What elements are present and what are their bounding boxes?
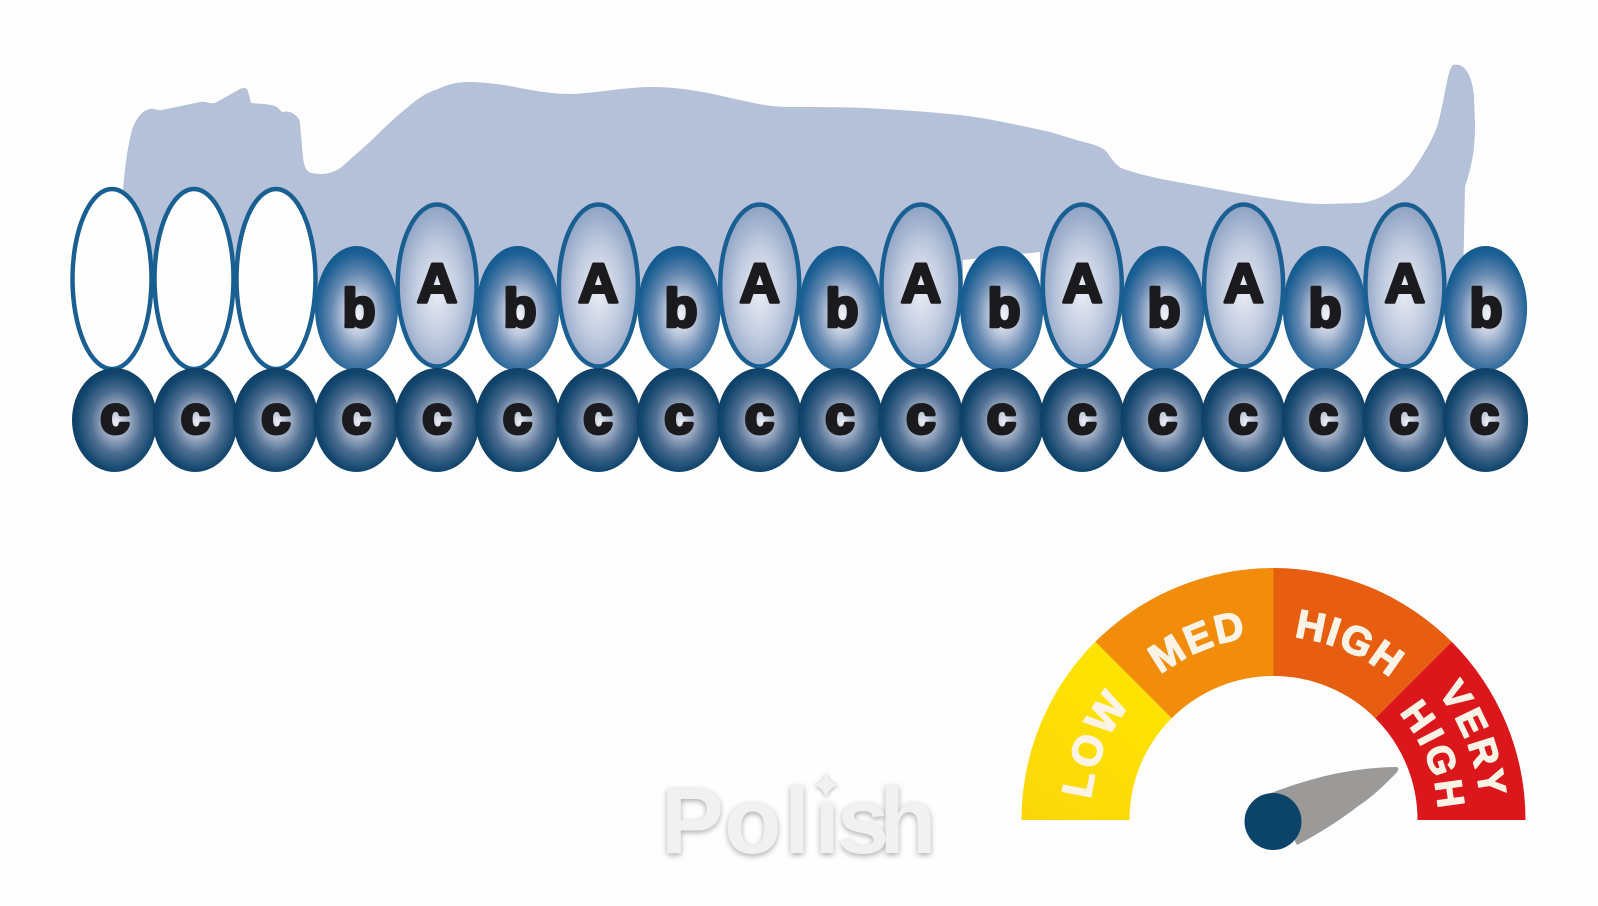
cell A 6 [1204,204,1283,366]
cell A 1: A [417,252,457,314]
cell c 8 [637,368,722,472]
cell c 7 [556,368,641,472]
cell A 4 [882,204,960,366]
cell b 2: b [504,278,536,338]
cell c 18: c [1470,387,1499,445]
cell c 6: c [503,387,532,445]
row of b cells [315,246,1527,371]
cell b 8: b [1470,278,1502,338]
row of A cells [398,204,1444,366]
row of c cells [72,368,1528,472]
cell A 3 [720,204,799,366]
cell c 14: c [1148,387,1177,445]
gauge segment: high [1274,568,1452,718]
empty missing cells [72,189,316,369]
cell c 3 [233,368,318,472]
cell A 1 [398,204,477,366]
gauge label: LOW: LOW [1062,688,1126,798]
cell A 3: A [739,252,780,314]
cell c 13: c [1068,387,1096,445]
gauge label: VERY: VERY [1442,676,1507,793]
Polish watermark logo [661,768,936,873]
cell c 9: c [745,387,774,445]
empty cell 2 [154,189,234,369]
cell b 4 [799,246,882,371]
cell c 17 [1362,368,1447,472]
empty cell 1 [72,189,152,369]
cell A 5 [1043,204,1122,366]
cell c 16: c [1309,387,1338,445]
gauge segment: medium [1095,568,1274,718]
cell c 12: c [987,387,1016,445]
cell b 5 [960,246,1043,371]
gauge needle [1244,767,1398,850]
cell b 8 [1444,246,1527,371]
gauge label: HIGH: HIGH [1296,609,1405,677]
cell c 11: c [907,387,935,445]
watermark sparkle [814,773,838,797]
cell b 1: b [342,278,376,338]
cell c 18 [1443,368,1528,472]
cell c 5 [395,368,480,472]
cell A 5: A [1062,252,1103,314]
watermark wordmark: Polish [661,768,936,873]
cell c 10: c [826,387,854,445]
gauge label: HIGH second line: HIGH [1400,698,1465,807]
cell c 9 [717,368,802,472]
cell b 3: b [664,278,698,338]
cell c 7: c [584,387,612,445]
cell c 17: c [1390,387,1418,445]
cell b 5: b [988,278,1020,338]
needle hub [1244,793,1302,850]
cell b 7 [1283,246,1366,371]
gauge label: MED: MED [1146,613,1242,674]
risk gauge [1022,568,1526,850]
body silhouette lying down [123,65,1475,285]
gauge segment: very high [1375,642,1526,820]
cell A 6: A [1223,252,1264,314]
gauge segment: low [1022,642,1172,820]
cell b 3 [638,246,721,371]
cell c 8: c [665,387,693,445]
cell c 12 [959,368,1044,472]
cell c 1 [72,368,157,472]
cell c 15: c [1229,387,1257,445]
cell b 6: b [1148,278,1180,338]
cell A 7 [1365,204,1444,366]
cell c 16 [1282,368,1367,472]
cell A 4: A [901,252,941,314]
cell c 4 [314,368,399,472]
cell c 11 [878,368,964,472]
cell A 2 [559,204,638,366]
cell c 15 [1201,368,1286,472]
cell c 14 [1120,368,1206,472]
cell c 6 [475,368,560,472]
cell c 10 [798,368,883,472]
cell c 1: c [101,387,129,445]
cell c 2 [153,368,238,472]
cell A 2: A [578,252,619,314]
cell A 7: A [1385,252,1425,314]
cell b 6 [1122,246,1204,371]
dot mask under sparkle [814,776,839,800]
cell c 2: c [181,387,210,445]
cell c 5: c [423,387,451,445]
cell c 4: c [342,387,371,445]
cell b 2 [476,246,559,371]
cell c 13 [1040,368,1125,472]
needle body [1271,767,1398,845]
cell b 4: b [826,278,858,338]
cell b 1 [315,246,398,371]
cell b 7: b [1308,278,1342,338]
cell c 3: c [262,387,290,445]
empty cell 3 [236,189,316,369]
